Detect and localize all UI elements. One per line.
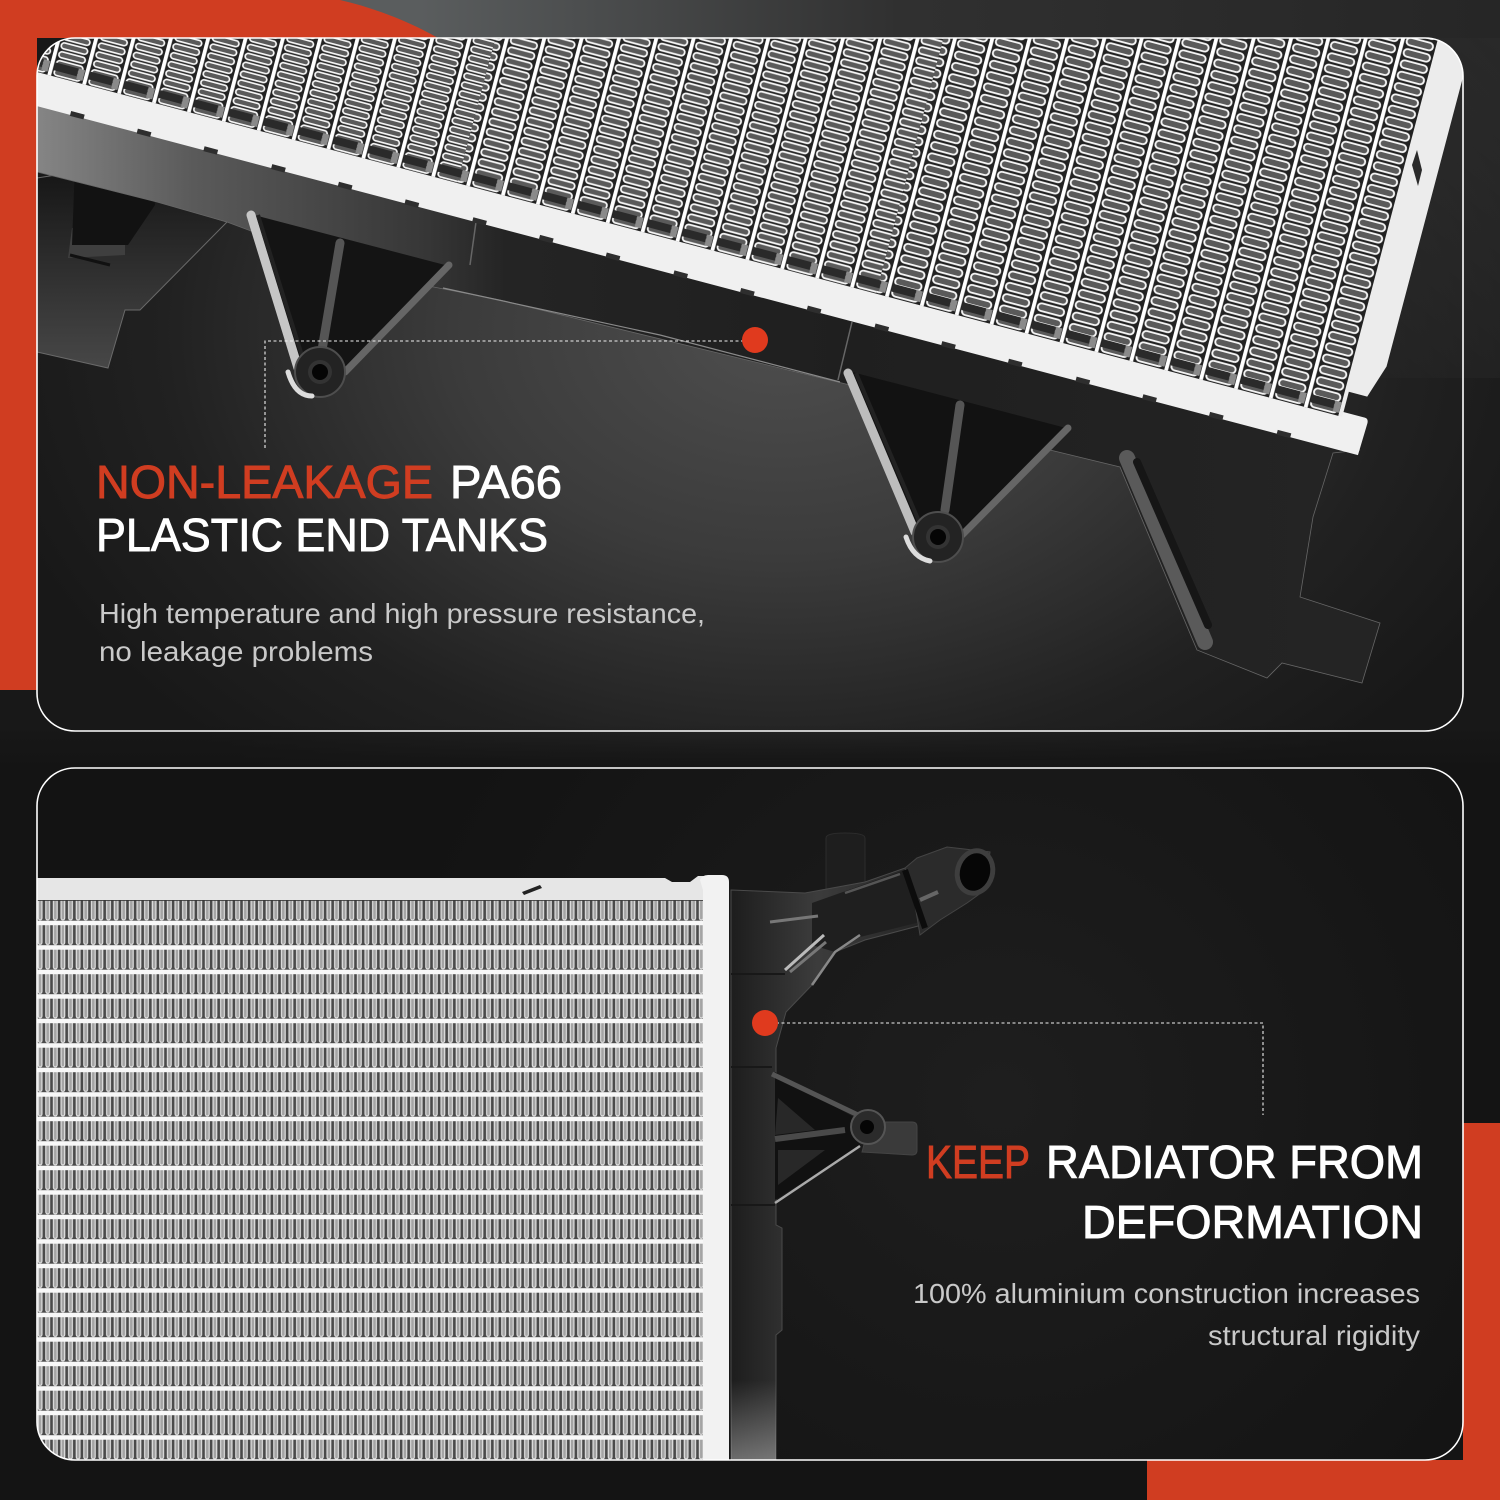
header notch tabs xyxy=(70,111,1291,438)
callout leader line xyxy=(765,1023,1263,1115)
fin shadow blocks xyxy=(39,59,1342,413)
nozzle xyxy=(905,844,1001,935)
panel: plastic end tanks xyxy=(0,0,1479,731)
side plate slot xyxy=(1412,150,1422,186)
lower mount bracket xyxy=(772,1072,917,1203)
tank seam xyxy=(470,222,852,380)
callout leader line xyxy=(265,341,755,448)
fins middle xyxy=(457,38,944,294)
mounting bracket right xyxy=(848,372,1068,562)
tank lower edge highlight xyxy=(443,288,840,382)
description xyxy=(913,1278,1420,1351)
heading: DEFORMATION xyxy=(1082,1196,1423,1248)
tank lower glow xyxy=(731,1388,776,1460)
orange corner accent: top left xyxy=(0,0,438,690)
callout dot xyxy=(742,327,768,353)
tank end rib xyxy=(1127,458,1208,642)
white side plate xyxy=(700,875,729,1460)
heading xyxy=(96,456,562,561)
top white band xyxy=(37,876,705,900)
panel background xyxy=(37,768,1463,1460)
fins grid xyxy=(37,901,704,1461)
heading: NON-LEAKAGE xyxy=(96,456,433,508)
panel outline xyxy=(37,768,1463,1460)
plastic end tank body xyxy=(37,95,1380,683)
fins right xyxy=(876,38,1434,414)
description: 100% aluminium construction increases xyxy=(913,1278,1420,1309)
heading xyxy=(926,1136,1423,1248)
panel: keep radiator from deformation xyxy=(37,768,1463,1461)
description xyxy=(99,598,705,667)
hose dark body xyxy=(812,872,909,952)
heading: PLASTIC END TANKS xyxy=(96,509,548,561)
heading: KEEP xyxy=(926,1136,1030,1188)
left mounting block xyxy=(37,162,227,368)
radiator photo: front view xyxy=(37,833,1001,1461)
description: structural rigidity xyxy=(1208,1320,1420,1351)
plastic tank xyxy=(731,833,1001,1460)
radiator photo: angled view xyxy=(0,0,1479,683)
mounting bracket left xyxy=(251,215,449,397)
heading: PA66 xyxy=(450,456,562,508)
callout dot xyxy=(752,1010,778,1036)
hose clip details xyxy=(731,874,900,1205)
tank and hose body xyxy=(731,868,922,1460)
vertical stub pipe xyxy=(826,833,865,893)
description: High temperature and high pressure resistance, xyxy=(99,598,705,629)
fins left xyxy=(38,38,496,183)
white side plate xyxy=(1338,40,1462,416)
small top slot xyxy=(522,885,542,895)
aluminium core and white header xyxy=(38,38,1462,456)
panel outline xyxy=(37,38,1463,731)
heading: RADIATOR FROM xyxy=(1046,1136,1423,1188)
description: no leakage problems xyxy=(99,636,373,667)
orange corner accent: bottom right xyxy=(1147,1123,1500,1500)
white header band xyxy=(0,52,1369,455)
